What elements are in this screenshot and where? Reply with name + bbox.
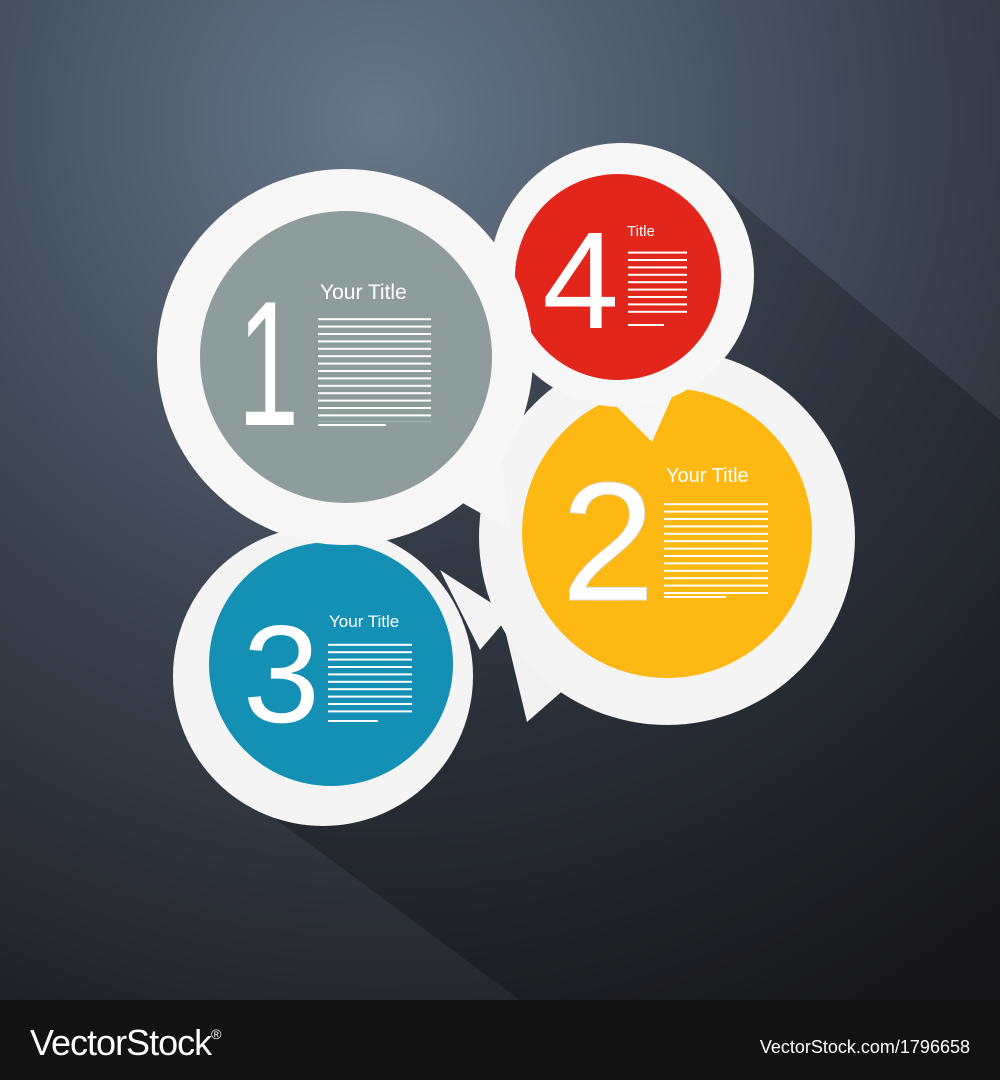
circle 1: gray (157, 169, 533, 545)
footer bar (0, 1000, 1000, 1080)
circle 3: blue: 3 (243, 597, 320, 752)
circle 4: red: 4 (542, 204, 619, 358)
circle 2: yellow: 2 (561, 447, 655, 636)
circle 2: yellow (479, 349, 855, 725)
circle 1: gray: Your Title (320, 281, 407, 304)
footer bar: VectorStock (30, 1022, 211, 1063)
circle 4: red: Title (627, 223, 655, 240)
circle 1: gray: 1 (238, 265, 299, 463)
circle 3: blue: Your Title (329, 612, 399, 631)
circle 2: yellow: Your Title (666, 465, 749, 487)
circle 3: blue (173, 526, 510, 826)
footer bar: VectorStock.com/1796658 (760, 1037, 970, 1057)
circle 4: red (490, 143, 754, 442)
long shadow (180, 160, 1000, 1000)
footer bar: ® (211, 1026, 222, 1042)
